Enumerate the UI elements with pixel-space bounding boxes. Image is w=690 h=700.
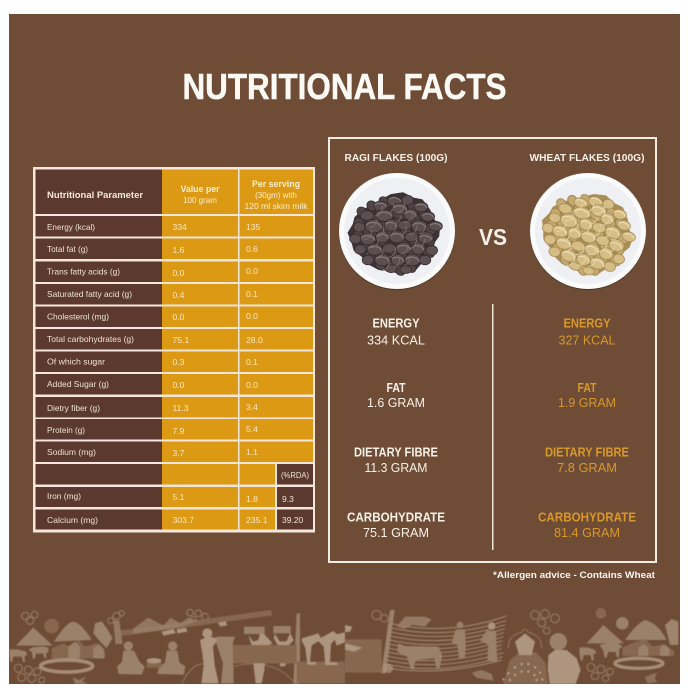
values per 100 gram: 0.3 — [172, 357, 185, 367]
panel: nutrition table — [33, 167, 315, 532]
values per serving: 0.0 — [246, 266, 258, 276]
parameter labels: Saturated fatty acid (g) — [47, 289, 132, 299]
pond and swirls — [14, 660, 93, 684]
wheat stats: 81.4 GRAM — [554, 525, 620, 540]
values per serving: 235.1 — [246, 515, 268, 525]
values per 100 gram: 0.4 — [172, 290, 185, 300]
wheat stats — [538, 316, 636, 540]
swirls and sun — [22, 609, 208, 633]
values per serving: 0.1 — [246, 289, 258, 299]
icon: bowl of ragi flakes — [336, 173, 455, 291]
illustration: village scene, left half — [9, 609, 345, 684]
row cell backgrounds — [36, 216, 313, 530]
parameter labels: Cholesterol (mg) — [47, 312, 109, 322]
parameter labels: Total carbohydrates (g) — [47, 334, 134, 344]
ragi stats: DIETARY FIBRE — [354, 446, 438, 460]
column heading: ragi flakes: RAGI FLAKES (100G) — [344, 152, 448, 164]
panel: ragi vs wheat comparison — [329, 138, 658, 562]
values per serving: 1.8 — [246, 494, 258, 504]
ragi stats: CARBOHYDRATE — [347, 510, 445, 524]
ragi stats: 11.3 GRAM — [364, 460, 428, 475]
title: NUTRITIONAL FACTS — [182, 66, 506, 107]
values per serving: 0.1 — [246, 357, 258, 367]
allergen note: *Allergen advice - Contains Wheat — [493, 570, 656, 581]
RDA column — [281, 471, 309, 525]
table header row: 120 ml skim milk — [244, 202, 309, 211]
hills and huts — [16, 621, 113, 658]
values per serving: 3.4 — [246, 402, 258, 412]
ragi stats: ENERGY — [372, 316, 420, 330]
values per serving — [246, 222, 268, 525]
ragi stats: FAT — [386, 381, 406, 395]
values per 100 gram: 7.9 — [172, 426, 185, 436]
values per 100 gram: 0.0 — [172, 380, 185, 390]
values per 100 gram — [172, 222, 194, 525]
values per 100 gram: 0.0 — [172, 312, 185, 322]
values per serving: 28.0 — [246, 335, 263, 345]
ragi stats: 75.1 GRAM — [363, 525, 429, 540]
plough end and swirls — [345, 610, 388, 673]
parameter labels — [47, 222, 134, 525]
RDA column: 9.3 — [282, 494, 294, 504]
standing woman with loom — [182, 628, 295, 684]
table header row: Nutritional Parameter — [47, 190, 144, 200]
ox and farmers — [397, 622, 497, 669]
table header row: (30gm) with — [255, 191, 297, 200]
values per serving: 0.0 — [246, 311, 258, 321]
icon: bowl of wheat flakes — [516, 163, 658, 304]
values per 100 gram: 303.7 — [172, 515, 194, 525]
wheat stats: ENERGY — [564, 316, 611, 330]
column heading: wheat flakes: WHEAT FLAKES (100G) — [530, 152, 644, 164]
seated figures — [117, 641, 185, 675]
table header row: Value per — [180, 184, 220, 194]
values per serving: 0.6 — [246, 244, 258, 254]
values per 100 gram: 3.7 — [172, 448, 185, 458]
parameter labels: Protein (g) — [47, 425, 85, 435]
table header row: 100 gram — [183, 196, 217, 205]
wheat stats: 1.9 GRAM — [558, 395, 616, 410]
values per 100 gram: 11.3 — [172, 403, 189, 413]
parameter labels: Added Sugar (g) — [47, 379, 109, 389]
parameter labels: Iron (mg) — [47, 491, 81, 501]
values per 100 gram: 1.6 — [172, 245, 185, 255]
canopy beam — [113, 610, 273, 644]
column divider — [492, 304, 494, 550]
values per serving: 5.4 — [246, 424, 258, 434]
values per serving: 135 — [246, 222, 261, 232]
ragi stats: 334 KCAL — [367, 332, 425, 348]
parameter labels: Trans fatty acids (g) — [47, 266, 120, 276]
wheat stats: CARBOHYDRATE — [538, 510, 636, 524]
ploughed field lines — [381, 610, 507, 681]
cows — [579, 642, 623, 660]
values per 100 gram: 0.0 — [172, 268, 185, 278]
values per serving: 0.0 — [246, 380, 258, 390]
parameter labels: Sodium (mg) — [47, 447, 96, 457]
basket carriers — [244, 626, 294, 683]
wheat stats: FAT — [578, 381, 597, 395]
woman with headscarf — [548, 633, 581, 684]
wheat stats: DIETARY FIBRE — [545, 446, 629, 460]
parameter labels: Of which sugar — [47, 356, 105, 366]
VS label: VS — [479, 224, 507, 250]
table header row — [36, 170, 313, 214]
parameter labels: Energy (kcal) — [47, 222, 95, 232]
parameter labels: Total fat (g) — [47, 244, 88, 254]
parameter labels: Dietry fiber (g) — [47, 403, 100, 413]
RDA column: (%RDA) — [281, 471, 309, 480]
values per serving: 1.1 — [246, 447, 258, 457]
values per 100 gram: 5.1 — [172, 492, 185, 502]
hills and huts — [587, 608, 678, 656]
ragi stats: 1.6 GRAM — [367, 395, 425, 410]
wheat stats: 327 KCAL — [558, 332, 616, 348]
page margin below panel — [0, 684, 690, 700]
parameter labels: Calcium (mg) — [47, 515, 98, 525]
ragi stats — [347, 316, 445, 540]
values per 100 gram: 334 — [172, 222, 187, 232]
table header row: Per serving — [252, 179, 300, 189]
illustration: village scene, right half — [345, 608, 678, 684]
values per 100 gram: 75.1 — [172, 335, 189, 345]
wheat stats: 7.8 GRAM — [557, 460, 617, 475]
RDA column: 39.20 — [282, 515, 304, 525]
cows — [9, 646, 49, 662]
peacock — [502, 610, 559, 684]
pond and swirls — [587, 658, 663, 683]
platform and bending figures — [233, 613, 345, 684]
